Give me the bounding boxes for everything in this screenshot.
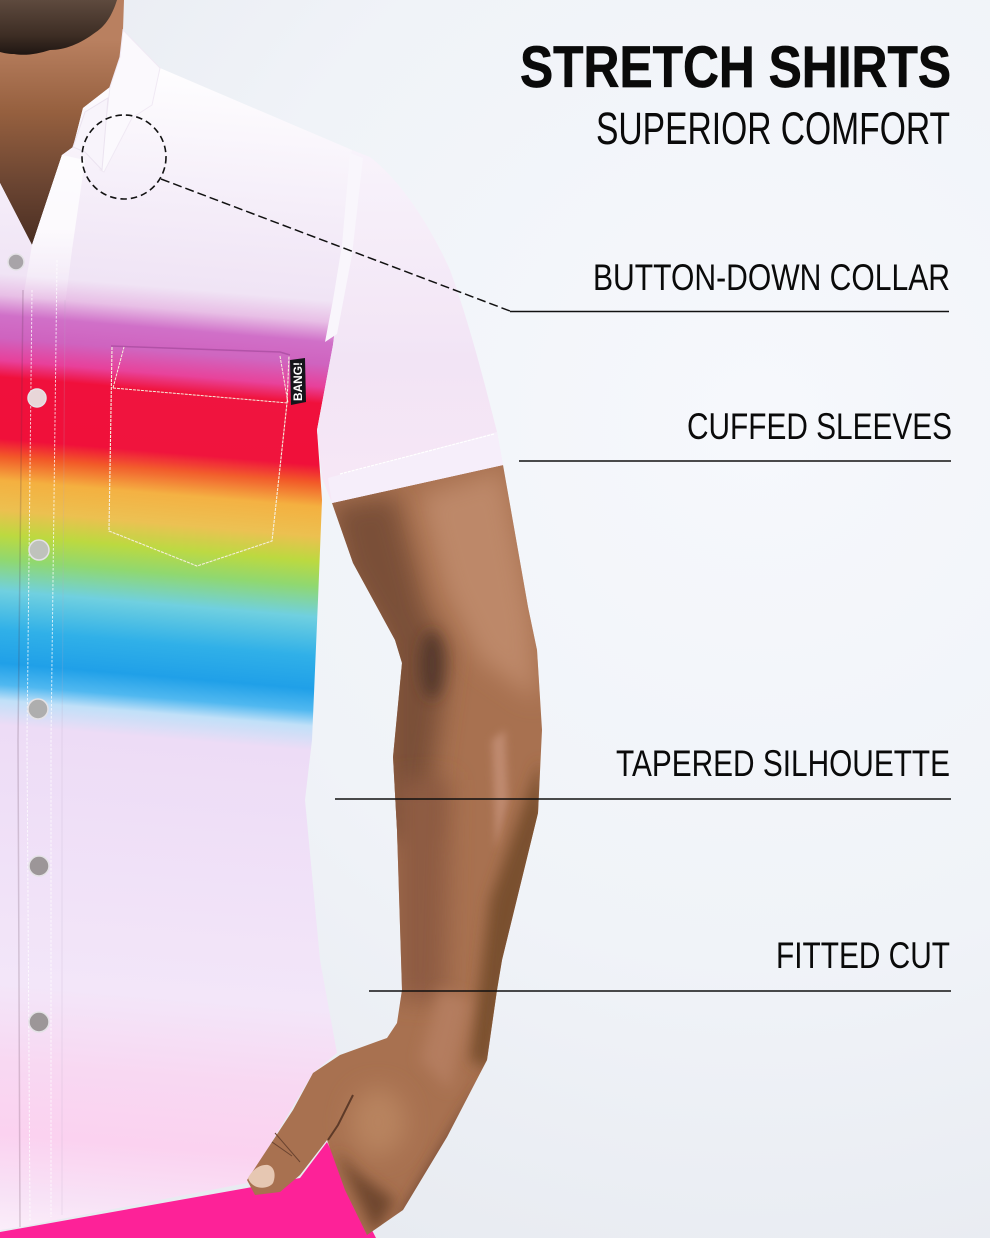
model: neck and beard (0, 0, 124, 245)
brand tag (290, 358, 306, 405)
pocket (107, 346, 290, 568)
beard (0, 0, 117, 55)
armhole seam (325, 153, 363, 342)
sleeve (317, 150, 503, 503)
button placket (18, 155, 85, 1227)
leader line: button-down collar (161, 179, 949, 312)
collar detail circle (82, 115, 166, 199)
neck (0, 0, 124, 245)
cuff stitching (340, 434, 494, 474)
leader line: tapered silhouette (335, 798, 951, 800)
model: pink shorts (0, 1142, 376, 1238)
model: arm and hand (247, 465, 545, 1235)
shirt body (0, 30, 352, 1230)
shirt buttons (8, 254, 49, 1032)
leader line: cuffed sleeves (519, 460, 951, 462)
collar leaf (73, 98, 108, 170)
brand tag: BANG! (293, 362, 305, 401)
thumb crease (328, 1095, 353, 1140)
leader line: fitted cut (369, 990, 951, 992)
sleeve cuff (328, 432, 503, 503)
collar (100, 30, 160, 172)
pocket flap seam (113, 347, 288, 403)
label: fitted cut: FITTED CUT (776, 935, 950, 976)
thumb nail (248, 1165, 275, 1188)
